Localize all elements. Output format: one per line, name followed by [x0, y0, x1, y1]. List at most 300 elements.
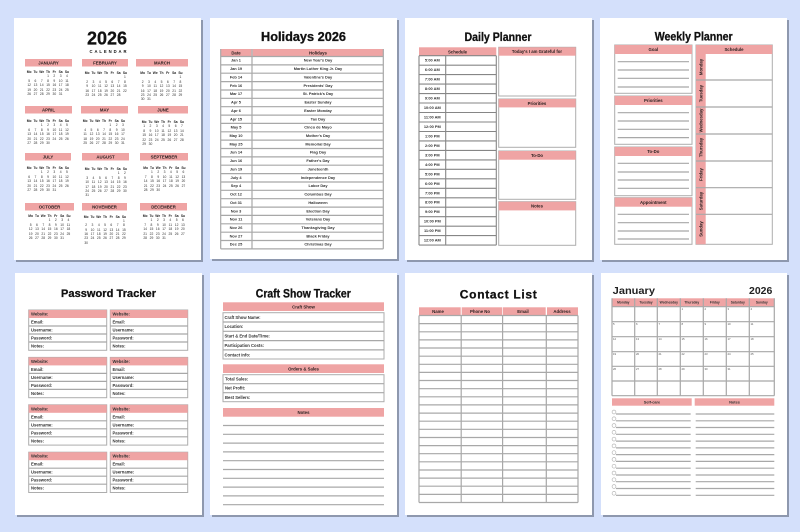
- calendar table: [612, 298, 774, 396]
- password card 4: Notes:: [112, 391, 126, 396]
- schedule table: Saturday: [698, 191, 703, 210]
- month: November: NOVEMBER: [92, 204, 118, 209]
- month: August: 22: [117, 185, 120, 189]
- month: December: 29: [150, 236, 153, 240]
- month: November: 1: [123, 219, 125, 223]
- section: craft show: Start & End Date/Time:: [224, 333, 270, 338]
- password card 5: Notes:: [31, 438, 44, 443]
- holiday dates: Oct 31: [230, 200, 243, 205]
- month: August: [82, 153, 129, 199]
- month: July: We: [39, 166, 44, 170]
- holiday dates: May 10: [230, 133, 242, 138]
- holiday dates: Jan 19: [230, 66, 243, 71]
- month: January: We: [39, 70, 44, 74]
- month: October: 8: [49, 223, 50, 227]
- month: December: 31: [162, 236, 166, 240]
- month: October: [25, 203, 74, 241]
- month: December: 7: [144, 223, 146, 227]
- month: June: Fr: [168, 120, 171, 124]
- month: July: Sa: [59, 166, 63, 170]
- box: priorities: [615, 96, 692, 144]
- schedule column: 6:00 PM: [425, 181, 440, 186]
- password card 5: Website:: [31, 406, 48, 411]
- table header: [221, 49, 383, 56]
- month: November: 27: [110, 236, 113, 240]
- month: May: 6: [97, 128, 99, 132]
- month: July: 28: [34, 188, 37, 192]
- month: July: 17: [52, 179, 56, 183]
- calendar table: 10: [728, 322, 731, 326]
- month: May: 14: [102, 132, 106, 136]
- calendar table: 11: [750, 322, 754, 326]
- month: October: 17: [60, 227, 64, 231]
- heading: January: January: [613, 285, 655, 297]
- month: February: 28: [117, 93, 120, 97]
- month: January: Fr: [53, 70, 56, 74]
- month: August: 6: [105, 176, 107, 180]
- month: June: We: [154, 120, 159, 124]
- password card 1: Password:: [31, 336, 52, 340]
- month: February: 9: [86, 84, 88, 88]
- month: May: 3: [122, 123, 124, 127]
- month: July: 22: [40, 184, 44, 188]
- password card 3: Password:: [31, 383, 52, 388]
- password card 4: Username:: [112, 375, 134, 380]
- month: October: 10: [60, 223, 64, 227]
- calendar table: 17: [728, 337, 731, 341]
- month: August: 15: [117, 180, 120, 184]
- contact table header: Address: [553, 309, 571, 314]
- month: August: 28: [110, 189, 114, 193]
- password card 4: Email:: [112, 367, 125, 372]
- month: October: 22: [48, 232, 51, 236]
- month: May: 1: [109, 123, 111, 127]
- month: October: 26: [29, 236, 32, 240]
- month: March: 8: [180, 80, 181, 84]
- month: August: 25: [92, 189, 95, 193]
- holiday names: St. Patrick's Day: [303, 91, 334, 96]
- month: October: 24: [60, 232, 64, 236]
- month: March: 15: [179, 84, 182, 88]
- month: August: AUGUST: [96, 154, 115, 159]
- notes list: [695, 398, 774, 495]
- month: May: 24: [121, 137, 125, 141]
- schedule table: Thursday: [698, 137, 703, 157]
- month: July: 31: [52, 188, 56, 192]
- month: January: 8: [47, 79, 49, 83]
- panel: 2026 calendar page: [14, 18, 203, 262]
- calendar table: 13: [636, 337, 640, 341]
- calendar table: 15: [682, 337, 685, 341]
- holiday names: Juneteenth: [308, 166, 329, 171]
- month: January: Th: [46, 70, 50, 74]
- password card 3: Username:: [31, 375, 53, 380]
- holiday dates: Jun 16: [230, 158, 243, 163]
- month: February: 27: [110, 93, 114, 97]
- calendar table: Saturday: [731, 301, 745, 305]
- password card 2: Username:: [112, 328, 134, 332]
- month: February: 26: [104, 93, 108, 97]
- month: January: 19: [27, 88, 31, 92]
- month: August: 11: [92, 180, 95, 184]
- month: May: Fr: [109, 119, 112, 123]
- month: September: 5: [176, 170, 178, 174]
- month: July: 12: [65, 175, 69, 179]
- month: May: Th: [102, 119, 106, 123]
- month: May: 30: [115, 141, 118, 145]
- section: craft show: [223, 302, 384, 359]
- month: August: Th: [104, 167, 108, 171]
- month: October: Fr: [54, 214, 57, 218]
- holiday names: New Year's Day: [304, 58, 333, 63]
- month: February: 6: [111, 80, 113, 84]
- box: to-do: [615, 147, 692, 196]
- calendar table: 14: [658, 337, 662, 341]
- month: April: 27: [27, 141, 31, 145]
- month: June: 19: [168, 133, 171, 137]
- month: January: 3: [60, 74, 62, 78]
- month: March: 22: [179, 89, 182, 93]
- month: March: 5: [161, 80, 162, 84]
- month: March: 2: [142, 80, 144, 84]
- month: September: 21: [144, 184, 147, 188]
- month: July: 24: [52, 184, 56, 188]
- month: October: 28: [41, 236, 45, 240]
- month: November: 21: [116, 232, 119, 236]
- month: December: 23: [156, 232, 160, 236]
- month: August: 27: [104, 189, 108, 193]
- calendar table: Thursday: [684, 301, 699, 305]
- month: September: [140, 153, 188, 193]
- schedule column: 11:00 PM: [424, 228, 441, 233]
- month: January: 11: [65, 79, 69, 83]
- holiday names: Valentine's Day: [304, 74, 333, 79]
- calendar table: 29: [682, 367, 685, 371]
- month: July: 19: [65, 179, 69, 183]
- month: December: 13: [181, 223, 185, 227]
- holiday names: Labor Day: [308, 183, 328, 188]
- month: January: 14: [40, 83, 44, 87]
- month: May: Mo: [83, 119, 88, 123]
- month: December: Mo: [143, 214, 148, 218]
- holiday names: Easter Sunday: [304, 100, 332, 104]
- month: September: SEPTEMBER: [151, 154, 178, 159]
- month: April: 15: [40, 132, 44, 136]
- month: November: 12: [103, 228, 107, 232]
- month: December: 17: [162, 227, 166, 231]
- calendar table: 21: [658, 352, 662, 356]
- month: March: 16: [141, 89, 144, 93]
- month: April: 16: [46, 132, 50, 136]
- month: November: 4: [98, 223, 100, 227]
- calendar table: 25: [750, 352, 754, 356]
- month: February: 25: [98, 93, 102, 97]
- month: January: Mo: [27, 70, 32, 74]
- month: January: 22: [46, 88, 50, 92]
- password card 2: Website:: [112, 312, 130, 316]
- month: January: Su: [65, 70, 69, 74]
- month: May: 27: [96, 141, 100, 145]
- password card 6: Email:: [112, 414, 125, 419]
- calendar table: Tuesday: [639, 301, 653, 305]
- title: contact list: Contact List: [460, 288, 537, 302]
- month: October: OCTOBER: [39, 204, 61, 209]
- month: March: 18: [153, 89, 157, 93]
- month: February: 15: [123, 84, 127, 88]
- holiday dates: Mar 17: [230, 91, 242, 96]
- month: April: 13: [27, 132, 31, 136]
- month: October: 12: [29, 227, 32, 231]
- month: July: 29: [40, 188, 44, 192]
- month: May: 22: [108, 137, 112, 141]
- month: July: 13: [27, 179, 31, 183]
- box: priorities: [499, 99, 576, 147]
- month: June: 12: [168, 129, 171, 133]
- month: May: 26: [90, 141, 93, 145]
- month: April: 10: [52, 128, 56, 132]
- month: January: 12: [27, 83, 31, 87]
- schedule table: Tuesday: [698, 84, 703, 102]
- password card 3: [29, 357, 107, 398]
- table header: Holidays: [309, 50, 328, 55]
- month: December: 10: [162, 223, 166, 227]
- month: October: 30: [54, 236, 58, 240]
- month: December: 2: [157, 218, 159, 222]
- contact table header: Email: [517, 309, 529, 314]
- month: November: 3: [92, 223, 93, 227]
- schedule table: Wednesday: [698, 108, 703, 132]
- title: weekly planner: Weekly Planner: [655, 32, 733, 44]
- month: November: 16: [84, 232, 88, 236]
- month: March: 12: [160, 84, 163, 88]
- calendar table: 5: [613, 322, 615, 326]
- month: May: 7: [103, 128, 105, 132]
- holiday dates: Jan 1: [231, 58, 242, 63]
- holiday dates: [230, 58, 243, 247]
- contact table header: Name: [432, 309, 444, 314]
- month: July: 30: [46, 188, 50, 192]
- month: November: 19: [103, 232, 107, 236]
- month: June: 28: [180, 138, 184, 142]
- month: October: Mo: [28, 214, 33, 218]
- month: May: 5: [91, 128, 92, 132]
- holiday names: Martin Luther King Jr. Day: [294, 66, 343, 71]
- month: February: 12: [104, 84, 108, 88]
- month: May: [81, 106, 128, 146]
- month: October: 29: [48, 236, 51, 240]
- month: August: 17: [85, 185, 89, 189]
- month: December: 30: [156, 236, 160, 240]
- box: to-do: To-Do: [647, 149, 660, 154]
- month: August: 10: [85, 180, 89, 184]
- schedule table: [696, 45, 772, 244]
- month: July: Tu: [34, 166, 37, 170]
- month: June: [138, 106, 188, 147]
- month: July: 7: [35, 175, 36, 179]
- month: August: 5: [99, 176, 101, 180]
- month: February: 20: [110, 89, 114, 93]
- month: January: 15: [46, 83, 50, 87]
- month: November: 17: [91, 232, 94, 236]
- month: March: 24: [147, 93, 151, 97]
- month: April: 20: [27, 137, 31, 141]
- month: June: 10: [155, 129, 159, 133]
- month: December: 11: [169, 223, 172, 227]
- box: goal: [615, 45, 692, 93]
- holiday names: Cinco de Mayo: [304, 125, 332, 130]
- month: February: 3: [93, 80, 94, 84]
- month: August: Sa: [117, 167, 121, 171]
- month: September: 3: [164, 170, 165, 174]
- month: January: 20: [34, 88, 37, 92]
- month: December: 8: [151, 223, 152, 227]
- month: July: [25, 153, 71, 193]
- month: March: 9: [142, 84, 144, 88]
- month: August: 23: [123, 185, 127, 189]
- schedule column: 5:00 AM: [425, 58, 440, 63]
- month: December: Sa: [175, 214, 179, 218]
- holiday dates: Dec 25: [230, 242, 243, 247]
- month: February: We: [97, 71, 102, 75]
- schedule column: 9:00 PM: [425, 209, 440, 214]
- month: October: 19: [29, 232, 32, 236]
- month: May: 20: [96, 137, 100, 141]
- schedule column: 10:00 PM: [424, 219, 441, 224]
- month: November: [82, 203, 128, 246]
- password card 2: Email:: [112, 320, 125, 324]
- month: August: 26: [98, 189, 102, 193]
- month: December: 27: [181, 232, 185, 236]
- month: May: Su: [121, 119, 125, 123]
- month: September: 15: [150, 179, 154, 183]
- month: March: 17: [147, 89, 151, 93]
- password card 8: Email:: [112, 462, 125, 467]
- month: March: 3: [148, 80, 150, 84]
- month: June: 29: [142, 142, 146, 146]
- month: May: 16: [115, 132, 118, 136]
- month: March: 30: [141, 97, 144, 101]
- month: October: 25: [67, 232, 70, 236]
- month: December: 15: [150, 227, 153, 231]
- schedule column: 1:00 PM: [425, 133, 440, 138]
- month: June: 26: [168, 138, 171, 142]
- month: June: 3: [156, 124, 158, 128]
- month: August: 2: [124, 171, 126, 175]
- month: May: 23: [115, 137, 118, 141]
- password card 7: Notes:: [31, 486, 44, 491]
- calendar table: 1: [682, 307, 684, 311]
- month: February: Sa: [117, 71, 121, 75]
- month: October: 15: [48, 227, 51, 231]
- calendar table: Wednesday: [660, 301, 678, 305]
- box: priorities: Priorities: [528, 101, 547, 106]
- month: December: 5: [176, 218, 178, 222]
- month: August: 19: [98, 185, 102, 189]
- month: August: 9: [124, 176, 126, 180]
- password card 8: Username:: [112, 470, 134, 475]
- title: daily planner: Daily Planner: [464, 32, 532, 44]
- box: appointment: [615, 198, 692, 244]
- month: September: 8: [151, 175, 153, 179]
- section: notes: Notes: [298, 410, 310, 415]
- month: February: Mo: [85, 71, 90, 75]
- month: January: Tu: [34, 70, 37, 74]
- month: February: FEBRUARY: [93, 60, 117, 65]
- password card 4: Website:: [112, 359, 130, 364]
- month: November: 14: [116, 228, 119, 232]
- month: November: 25: [97, 236, 101, 240]
- section: craft show: Contact Info:: [224, 352, 250, 357]
- month: September: 9: [157, 175, 159, 179]
- month: December: 12: [175, 223, 178, 227]
- month: July: Mo: [27, 166, 32, 170]
- month: April: 18: [59, 132, 62, 136]
- month: July: 1: [41, 170, 43, 174]
- month: June: 11: [161, 129, 165, 133]
- password card 7: Password:: [31, 478, 52, 483]
- month: November: Fr: [110, 214, 113, 218]
- month: April: 19: [65, 132, 69, 136]
- month: December: [140, 203, 187, 241]
- month: April: 22: [40, 137, 44, 141]
- month: November: We: [96, 214, 101, 218]
- month: October: 21: [41, 232, 45, 236]
- schedule column: 6:00 AM: [425, 67, 440, 72]
- month: September: 20: [182, 179, 185, 183]
- month: May: 13: [96, 132, 100, 136]
- schedule column: 12:00 AM: [424, 238, 441, 243]
- month: August: 20: [104, 185, 108, 189]
- calendar table: 22: [682, 352, 685, 356]
- month: May: 28: [102, 141, 106, 145]
- month: January: 25: [65, 88, 69, 92]
- month: October: Su: [66, 214, 71, 218]
- schedule column: 5:00 PM: [425, 171, 440, 176]
- month: July: 3: [53, 170, 55, 174]
- month: January: 30: [52, 92, 56, 96]
- month: July: 14: [34, 179, 37, 183]
- calendar table: 27: [636, 367, 640, 371]
- month: March: 10: [147, 84, 151, 88]
- month: March: 27: [166, 93, 170, 97]
- month: November: 18: [97, 232, 101, 236]
- month: April: 21: [34, 137, 37, 141]
- month: March: 14: [172, 84, 176, 88]
- month: September: Tu: [150, 166, 154, 170]
- section: orders and sales: [223, 364, 384, 402]
- month: July: 5: [66, 170, 68, 174]
- month: February: 7: [118, 80, 120, 84]
- month: June: Th: [161, 120, 165, 124]
- month: October: 6: [36, 223, 38, 227]
- month: March: 28: [172, 93, 176, 97]
- month: May: 31: [121, 141, 125, 145]
- month: July: 9: [47, 175, 49, 179]
- month: April: 5: [66, 123, 68, 127]
- month: July: 2: [47, 170, 49, 174]
- month: July: 20: [27, 184, 31, 188]
- schedule column: [419, 47, 496, 245]
- month: September: 22: [150, 184, 154, 188]
- contact table header: [419, 307, 578, 315]
- password card 1: Username:: [31, 328, 53, 332]
- month: June: Su: [180, 120, 184, 124]
- month: April: 17: [52, 132, 56, 136]
- month: June: 7: [181, 124, 183, 128]
- month: August: 24: [85, 189, 89, 193]
- section: craft show: Participation Costs:: [224, 343, 264, 348]
- password card 6: Username:: [112, 422, 134, 427]
